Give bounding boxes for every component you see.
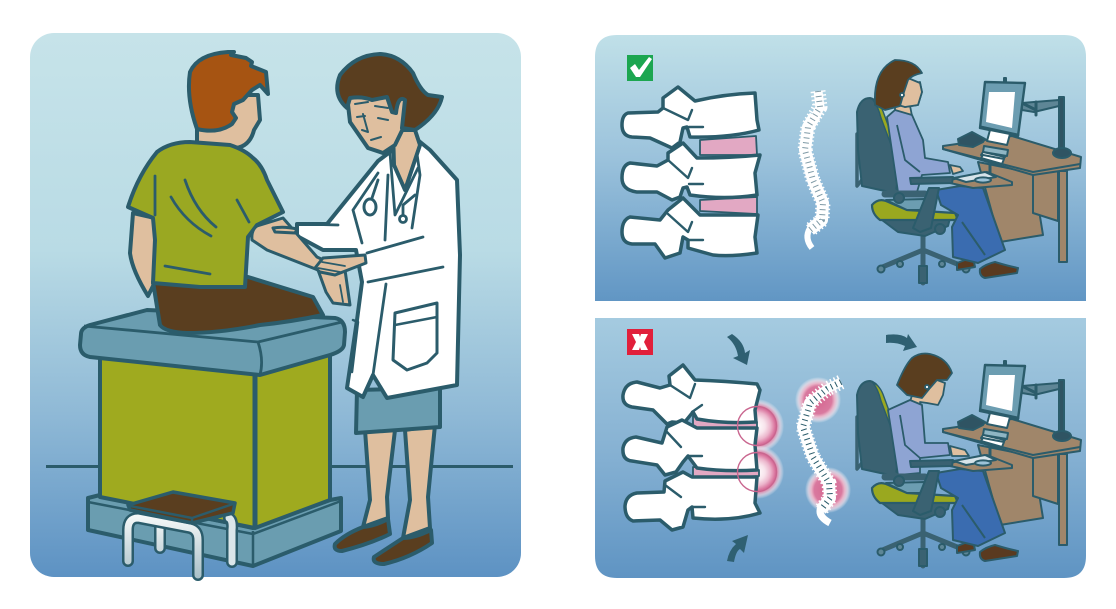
pain glow on discs [730,399,784,499]
small healthy spine [805,91,823,248]
icon: green check mark [627,55,653,81]
doctor coat [297,137,460,398]
doctor face and hair [337,54,442,190]
small curved spine [803,382,841,523]
healthy vertebrae [622,87,760,258]
seated woman: upright posture [857,60,1081,283]
spine pain glow [795,377,851,513]
seated woman: slouched posture [857,354,1081,566]
panel: examination scene [30,33,521,577]
arrow: head leaning forward [886,334,917,351]
panel: correct posture [595,35,1086,301]
step stool [128,492,235,575]
arrow: lower compression [727,535,748,562]
doctor [297,54,460,564]
compressed vertebrae [623,365,760,530]
doctor legs [335,388,440,564]
disc pressure rings [738,406,776,492]
clasped arms and hands [252,218,366,305]
icon: red cross mark [627,329,653,355]
arrow: upper compression [727,334,750,365]
man: arm, head and torso [128,52,323,333]
panel: poor posture [595,318,1086,578]
examination table [80,310,345,566]
